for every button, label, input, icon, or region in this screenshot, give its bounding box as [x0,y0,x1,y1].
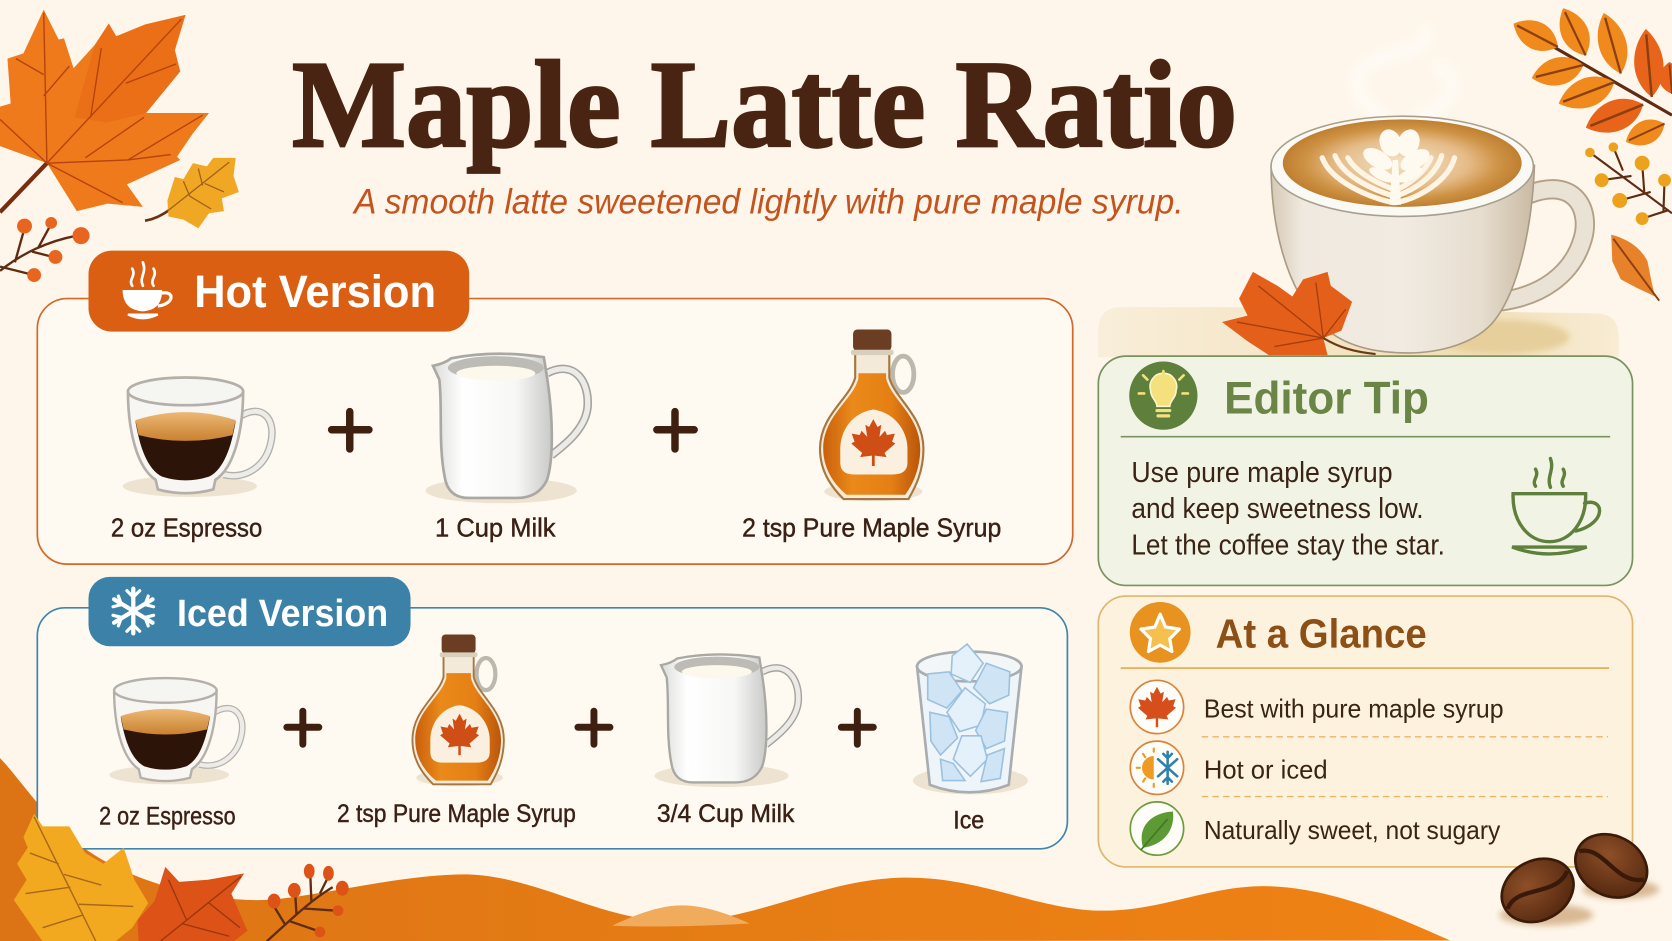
icon: light bulb [1129,361,1197,430]
iced version badge [89,577,411,646]
icon: snowflake [113,589,154,633]
decoration: small yellow leaf [145,158,239,228]
iced version badge: Iced Version [177,592,388,635]
bottom orange waves [0,758,1450,941]
plus sign [332,412,369,449]
illustration: latte cup [1098,27,1619,357]
coffee beans [1491,822,1659,934]
panel: at a glance [1098,596,1633,867]
tip body text: Let the coffee stay the star. [1131,528,1445,560]
decoration: leafy branch top right [1507,3,1672,153]
tip body text: and keep sweetness low. [1131,492,1424,524]
tip body text: Use pure maple syrup [1131,456,1393,488]
icon: milk pitcher [425,354,588,503]
label: 3/4 cup milk: 3/4 Cup Milk [657,801,795,828]
label: 2 oz espresso: 2 oz Espresso [99,803,236,830]
row: naturally sweet: Naturally sweet, not sugary [1204,815,1500,845]
icon: espresso cup [109,678,242,784]
icon: espresso cup [123,377,272,497]
icon: maple syrup bottle [820,329,923,501]
hot version badge [89,251,469,332]
decoration: large maple leaf top left [0,10,209,212]
label: 2 oz espresso: 2 oz Espresso [111,512,262,542]
row: pure maple syrup [1130,680,1504,734]
row: naturally sweet [1130,802,1500,855]
row: pure maple syrup: Best with pure maple syrup [1204,694,1504,724]
label: ice: Ice [953,808,984,835]
icon: maple syrup bottle [412,634,504,786]
decoration: falling leaf right [1611,235,1659,301]
subtitle: A smooth latte sweetened lightly with pure maple syrup. [352,182,1184,221]
icon: star badge [1130,602,1191,663]
tip body text [1131,456,1445,560]
icon: hot coffee cup [123,262,171,318]
plus sign [841,711,873,744]
row: hot or iced [1130,741,1328,794]
icon: coffee cup outline [1512,459,1600,554]
panel: hot version [37,251,1073,564]
plus sign [287,711,319,744]
decoration: yellow leaf bottom left [14,814,148,941]
decoration: berry branch bottom left [267,864,349,941]
label: maple syrup: 2 tsp Pure Maple Syrup [742,512,1001,542]
plus sign [578,711,610,744]
title: Maple Latte Ratio [292,36,1237,173]
label: maple syrup: 2 tsp Pure Maple Syrup [337,801,576,828]
hot version badge: Hot Version [194,265,436,317]
heading: editor tip: Editor Tip [1224,372,1429,424]
decoration: yellow berries top right [1585,142,1672,225]
decoration: red leaf bottom left [138,867,247,941]
panel: editor tip [1098,356,1633,585]
row: hot or iced: Hot or iced [1204,754,1328,784]
plus sign [657,412,694,449]
icon: milk pitcher [654,654,798,787]
label: 1 cup milk: 1 Cup Milk [435,512,556,542]
icon: glass of ice [913,644,1028,794]
panel: iced version [37,577,1067,849]
heading: at a glance: At a Glance [1216,610,1427,656]
decoration: berries top left [0,217,90,282]
